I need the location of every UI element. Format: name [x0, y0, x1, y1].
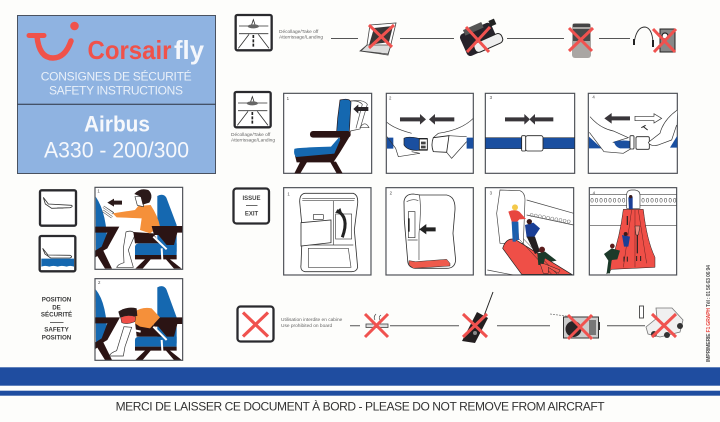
icon: video camera prohibited	[457, 17, 504, 57]
caption: take-off landing: Décollage/Take off	[231, 132, 271, 138]
icon: laptop prohibited	[360, 23, 396, 55]
label: safety position: SAFETY	[44, 327, 70, 334]
panel: exit step 1 open door	[284, 188, 371, 275]
icon: cigarette prohibited	[365, 314, 388, 337]
panel: belt step 1 seat upright: 1	[287, 96, 290, 101]
panel: brace step 2	[95, 279, 183, 360]
label: safety position: DE	[52, 304, 61, 311]
printer credit: IMPRIMERIE F1 GRAPH Tél : 01 56 63 06 94	[706, 265, 712, 362]
caption: use prohibited on board: Utilisation interdite en cabine	[281, 317, 343, 323]
aircraft model	[44, 112, 189, 162]
caption: take-off landing	[279, 29, 323, 40]
panel: belt step 1 seat upright	[284, 93, 372, 173]
icon: mobile phone prohibited	[462, 292, 493, 343]
row: seat belt instructions	[231, 92, 677, 173]
panel: belt step 2 fasten	[386, 93, 473, 173]
icon: aircraft on water	[40, 236, 75, 271]
label: safety position: POSITION	[42, 334, 72, 341]
panel: title header	[18, 16, 216, 174]
panel: belt step 2 fasten: 2	[389, 95, 392, 100]
icon: take-off and landing	[235, 92, 271, 127]
footer notice: MERCI DE LAISSER CE DOCUMENT À BORD - PLEASE DO NOT REMOVE FROM AIRCRAFT	[116, 399, 605, 414]
footer bands	[0, 367, 720, 396]
panel: exit step 3 evacuation slide: 3	[490, 191, 493, 196]
panel: exit step 4 slide seen from outside	[589, 188, 677, 275]
panel: brace step 2: 2	[98, 280, 101, 285]
panel: belt step 4 release: 4	[592, 95, 595, 100]
row: devices prohibited during take-off and landing	[236, 15, 676, 58]
panel: belt step 3 tighten: 3	[490, 95, 493, 100]
panel: exit step 2 door opened	[386, 188, 473, 275]
panel: brace step 1	[95, 187, 183, 269]
row: devices prohibited on board	[238, 292, 683, 343]
panel: belt step 4 release	[588, 93, 677, 173]
heading: safety instructions: SAFETY INSTRUCTIONS	[49, 84, 183, 98]
panel: exit step 4 slide seen from outside: 00000000	[590, 199, 626, 205]
icon: take-off and landing	[236, 15, 272, 50]
icon: prohibited sign	[238, 306, 274, 342]
icon: remote control toy prohibited	[640, 306, 683, 338]
caption: take-off landing	[231, 132, 275, 144]
caption: take-off landing: Atterrissage/Landing	[279, 34, 323, 40]
panel: brace step 1: 1	[97, 189, 100, 194]
caption: use prohibited on board: Use prohibited on board	[281, 323, 333, 329]
icon: TUI smile logo	[29, 22, 79, 58]
icon: headphones and player prohibited	[633, 27, 676, 52]
section: brace position	[40, 187, 183, 360]
icon: exit sign	[234, 188, 269, 224]
panel: exit step 4 slide seen from outside: 00000000	[641, 199, 677, 205]
heading: safety instructions: CONSIGNES DE SÉCURITÉ	[41, 69, 192, 84]
row: emergency exit instructions	[234, 188, 677, 275]
panel: exit step 3 evacuation slide: OOOOOOOOOO	[529, 212, 571, 226]
icon: aircraft in flight	[40, 190, 76, 226]
aircraft model: A330 - 200/300	[44, 137, 189, 162]
icon: exit sign: EXIT	[245, 211, 258, 217]
caption: take-off landing: Décollage/Take off	[279, 29, 319, 35]
caption: take-off landing: Atterrissage/Landing	[231, 138, 275, 144]
panel: exit step 3 evacuation slide	[485, 188, 574, 275]
panel: exit step 2 door opened: 2	[390, 191, 393, 196]
heading: safety instructions	[41, 69, 192, 98]
panel: belt step 3 tighten	[485, 93, 575, 173]
label: safety position: POSITION	[42, 297, 72, 304]
brand suffix: fly	[174, 35, 205, 65]
label: safety position	[41, 297, 72, 341]
panel: exit step 1 open door: 1	[287, 191, 290, 196]
aircraft model: Airbus	[84, 112, 150, 137]
label: safety position: SÉCURITÉ	[41, 311, 72, 319]
icon: electronic device prohibited	[569, 23, 593, 58]
icon: radio prohibited	[550, 314, 600, 339]
panel: exit step 4 slide seen from outside: 4	[593, 191, 596, 196]
icon: exit sign: ISSUE	[242, 196, 261, 202]
brand name: Corsair	[88, 35, 172, 65]
caption: use prohibited on board	[281, 317, 343, 329]
